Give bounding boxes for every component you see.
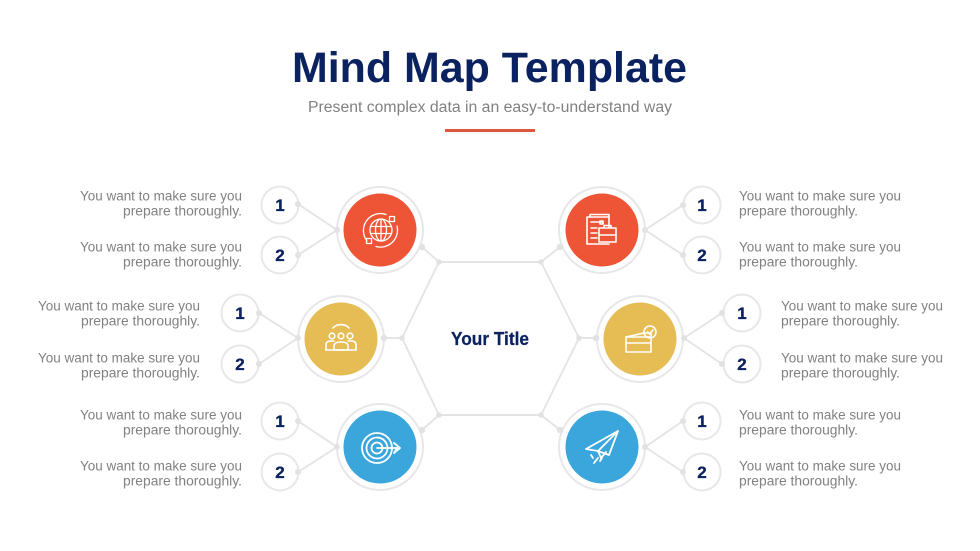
connector dots [256,201,725,475]
title underline [445,129,535,132]
node: top left [337,187,423,273]
text block: left top 2: You want to make sure you [80,240,242,254]
text block: right bottom 2: You want to make sure you [739,458,901,474]
text block: right top 1: prepare thoroughly. [739,204,858,218]
text block: right middle 2 [781,350,943,380]
text block: left top 1 [80,188,242,218]
numbered badges: right top: 1 [697,196,707,215]
subtitle: Present complex data in an easy-to-understand way [308,99,672,116]
numbered badges: right top [684,186,720,274]
text block: left bottom 1: prepare thoroughly. [123,422,242,438]
text block: right middle 2: You want to make sure you [781,350,943,366]
text block: left middle 1: prepare thoroughly. [81,314,200,328]
numbered badges: left bottom: 2 [275,463,285,482]
text block: right top 1: You want to make sure you [739,188,901,204]
node: bottom right [559,404,645,490]
icon: globe with arrows [363,214,398,247]
node: top right [559,187,645,273]
node: middle right [597,296,683,382]
text block: right middle 2: prepare thoroughly. [781,366,900,380]
title: Mind Map Template [292,44,687,92]
center label: Your Title [451,328,529,349]
text block: left bottom 2 [80,458,242,488]
text block: left top 1: prepare thoroughly. [123,204,242,218]
numbered badges: left bottom: 1 [275,412,285,431]
text block: left middle 2 [38,350,200,380]
numbered badges: right bottom: 2 [697,463,707,482]
text block: left bottom 2: prepare thoroughly. [123,474,242,488]
icon: paper plane [586,431,618,463]
numbered badges: left top [262,186,298,274]
text block: left bottom 2: You want to make sure you [80,458,242,474]
text block: right middle 1: You want to make sure you [781,298,943,314]
text block: right middle 1 [781,298,943,328]
text block: right top 2: You want to make sure you [739,240,901,254]
text block: right middle 1: prepare thoroughly. [781,314,900,328]
text block: right top 1 [739,188,901,218]
icon: box with clock [626,326,656,352]
text block: left top 2: prepare thoroughly. [123,254,242,270]
numbered badges: left middle: 1 [235,304,245,323]
text block: left bottom 1: You want to make sure you [80,408,242,422]
text block: right bottom 1: prepare thoroughly. [739,422,858,438]
text block: right bottom 1: You want to make sure you [739,408,901,422]
text block: right top 2: prepare thoroughly. [739,254,858,270]
numbered badges: right middle [724,294,760,382]
numbered badges: right middle: 1 [737,304,747,323]
numbered badges: left top: 2 [275,246,285,265]
text block: left middle 1 [38,298,200,328]
text block: right bottom 2 [739,458,901,488]
node: bottom left [337,404,423,490]
numbered badges: left middle [222,294,258,382]
numbered badges: right top: 2 [697,246,707,265]
text block: left bottom 1 [80,408,242,438]
icon: group of people [326,325,356,350]
connector lines [259,204,722,472]
text block: right bottom 1 [739,408,901,438]
text block: left middle 2: prepare thoroughly. [81,366,200,380]
text block: left top 1: You want to make sure you [80,188,242,204]
numbered badges: right bottom [684,402,720,490]
icon: document and briefcase [587,214,616,244]
node: middle left [298,296,384,382]
numbered badges: right middle: 2 [737,355,747,374]
text block: left middle 1: You want to make sure you [38,298,200,314]
numbered badges: left bottom [262,402,298,490]
text block: right top 2 [739,240,901,270]
icon: target with arrow [362,433,400,463]
numbered badges: left top: 1 [275,196,285,215]
text block: left middle 2: You want to make sure you [38,350,200,366]
numbered badges: right bottom: 1 [697,412,707,431]
numbered badges: left middle: 2 [235,355,245,374]
text block: left top 2 [80,240,242,270]
text block: right bottom 2: prepare thoroughly. [739,474,858,488]
